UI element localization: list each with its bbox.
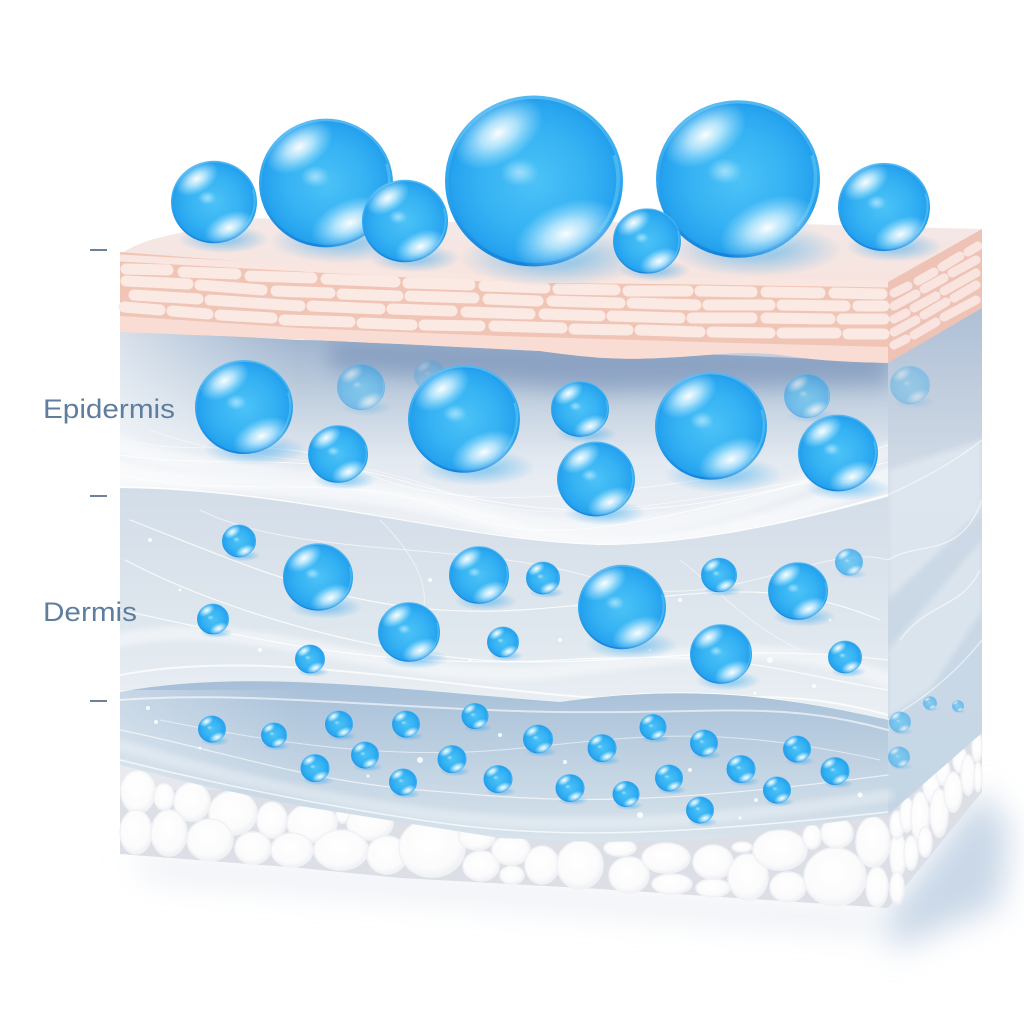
fat cells: front: [120, 771, 890, 907]
skin cells: front: [124, 269, 884, 334]
bottom band: [120, 316, 888, 363]
fat layer: [120, 728, 982, 908]
tick mark: top: [90, 249, 107, 251]
dermal side face: [888, 306, 982, 815]
ground shadow: [130, 790, 1010, 950]
sparkles: [146, 706, 862, 820]
sparkles: [148, 538, 832, 694]
fibres: [120, 510, 888, 715]
white collagen wisps: [120, 430, 888, 545]
skin cells: side: [894, 246, 978, 345]
fat cells: side: [890, 732, 982, 904]
lip band: [120, 258, 888, 284]
hypodermis water layer: [120, 681, 888, 842]
epidermis water layer: [120, 330, 888, 545]
fibres: [120, 697, 888, 833]
front face: [120, 252, 888, 363]
label: Dermis: Dermis: [43, 597, 137, 627]
dermis water layer: [120, 488, 888, 720]
droplets: epidermis: [192, 353, 889, 525]
droplets: dermis: [196, 522, 867, 691]
tick mark: bottom: [90, 700, 107, 702]
droplets: hypodermis: [197, 701, 853, 827]
label: Epidermis: Epidermis: [43, 394, 175, 424]
side-face faded droplets: [887, 363, 966, 770]
top surface: [120, 218, 982, 282]
stratum corneum pink layer: [120, 218, 982, 363]
tick mark: middle: [90, 495, 107, 497]
side face: [888, 229, 982, 363]
droplets: surface: [169, 82, 942, 287]
